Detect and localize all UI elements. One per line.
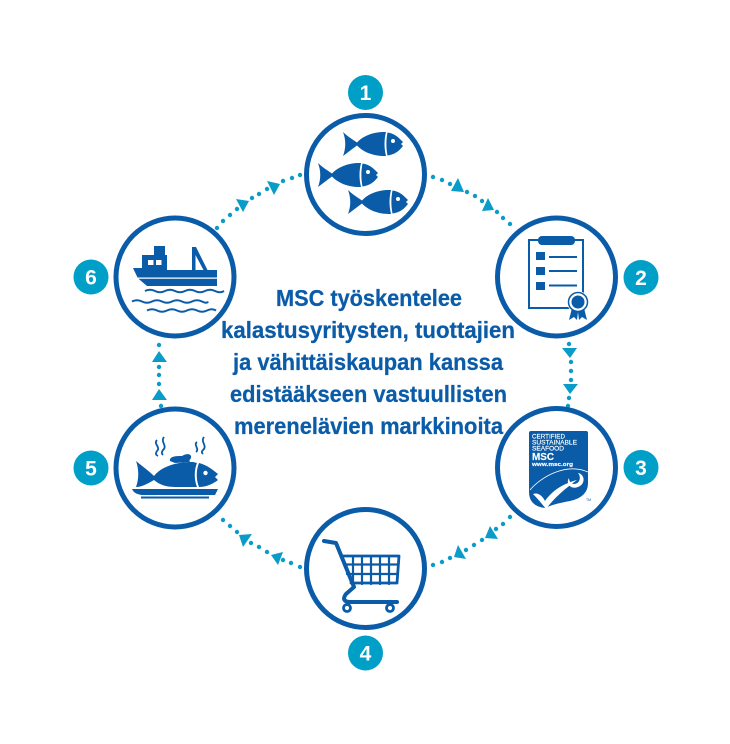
badge 2 (624, 260, 658, 295)
arrow: step 6 to 1 (215, 173, 302, 230)
icon: MSC ecolabel: SUSTAINABLE (532, 440, 578, 446)
arrow: step 5 to 6 (152, 343, 167, 408)
icon: clipboard with seal (529, 236, 589, 320)
central text: MSC työskentelee (276, 285, 462, 311)
central text: edistääkseen vastuullisten (230, 381, 507, 407)
badge 4: 4 (360, 642, 372, 666)
circle 6: fishing vessel (116, 218, 234, 336)
circle 1: fish stocks (306, 116, 424, 234)
icon: MSC ecolabel: SEAFOOD (532, 446, 564, 452)
arrow: step 2 to 3 (562, 342, 578, 408)
icon: MSC ecolabel: www.msc.org (531, 462, 573, 468)
circle 5: cooked fish (116, 409, 234, 527)
arrow: step 4 to 5 (221, 518, 302, 569)
badge 5: 5 (85, 458, 97, 480)
icon: MSC ecolabel: CERTIFIED (532, 434, 565, 440)
central text: ja vähittäiskaupan kanssa (232, 349, 503, 375)
badge 3 (624, 450, 658, 485)
central text: merenelävien markkinoita (234, 413, 503, 439)
icon: three fish (318, 132, 408, 214)
icon: shopping cart (324, 541, 399, 612)
icon: fish on a plate (132, 437, 218, 498)
icon: fishing boat on waves (132, 246, 224, 312)
arrow: step 3 to 4 (431, 515, 512, 567)
badge 6 (74, 260, 108, 294)
badge 2: 2 (635, 267, 647, 290)
badge 6: 6 (85, 266, 97, 290)
circle 4: retail (306, 510, 424, 628)
badge 4 (348, 636, 383, 670)
icon: MSC ecolabel: MSC (532, 452, 554, 463)
circle 2: certification (498, 218, 616, 336)
badge 1 (348, 75, 383, 110)
central text: kalastusyritysten, tuottajien (221, 317, 515, 343)
arrow: step 1 to 2 (431, 175, 512, 226)
badge 3: 3 (635, 457, 647, 480)
central text (221, 285, 515, 439)
icon: MSC ecolabel: TM (586, 498, 591, 502)
circle 3: MSC label (498, 408, 616, 526)
badge 5 (74, 450, 108, 486)
badge 1: 1 (360, 82, 372, 105)
icon: MSC ecolabel (529, 431, 591, 509)
